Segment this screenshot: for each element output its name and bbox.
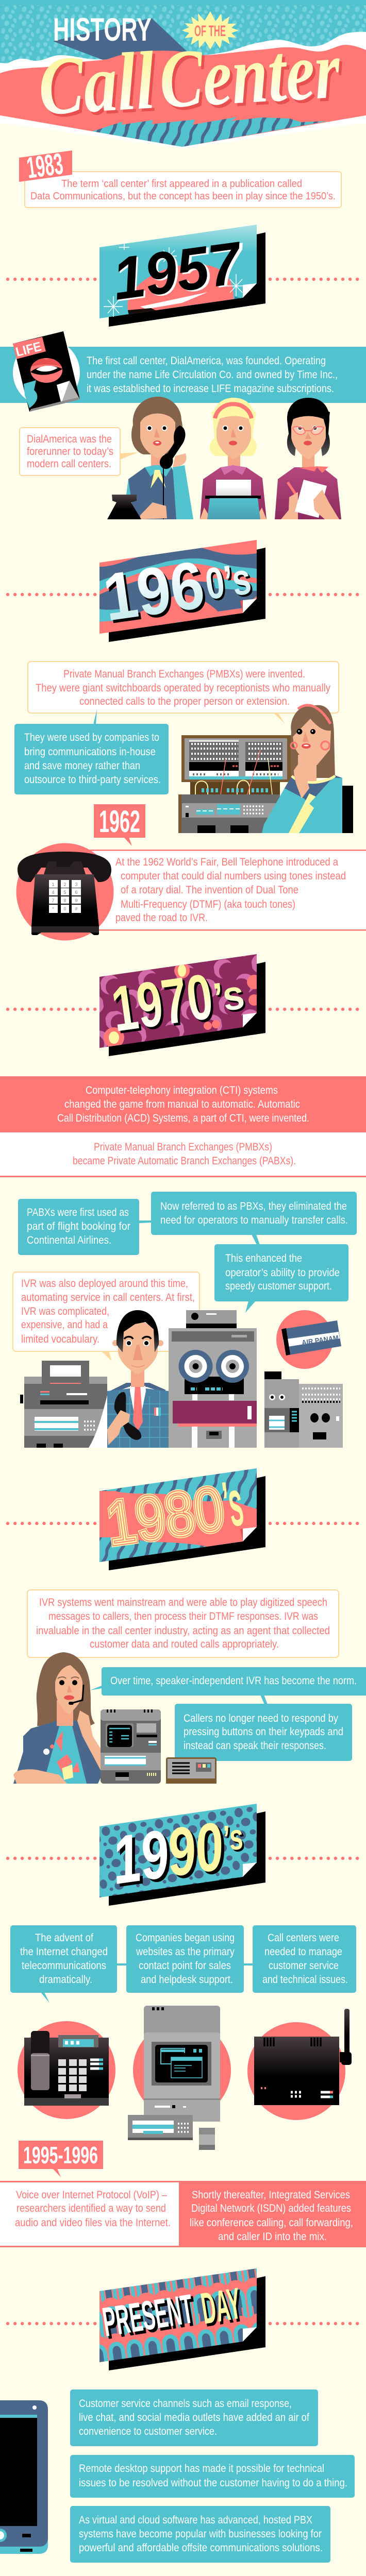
section heading: 1957 — [8, 222, 358, 327]
section heading: 1970's: ’s — [210, 971, 247, 1021]
teal callout: customer service channels: Customer service channels such as email response, — [79, 2398, 292, 2410]
keypad: 1 — [52, 882, 55, 887]
year tag: 1983 — [19, 147, 72, 185]
teal callout: call centers needed: and technical issues. — [262, 1974, 348, 1986]
icon: AIR PANAM ticket: AIR PANAM — [301, 1333, 339, 1347]
text box: PMBXs invented: They were giant switchboards operated by receptionists who manually — [36, 682, 330, 694]
section heading: 1990's: ’s — [220, 1816, 246, 1859]
text box: 1983: Data Communications, but the concept has been in play since the 1950’s. — [30, 191, 336, 202]
teal callout: websites: websites as the primary — [136, 1946, 235, 1958]
illustration: tape deck — [169, 1310, 257, 1448]
section heading: 1960's: 0’s — [204, 555, 256, 611]
teal callout: speedy support: operator’s ability to provide — [225, 1267, 340, 1279]
icon: LIFE magazine: LIFE — [14, 340, 43, 360]
text box: IVR deployed: IVR was complicated, — [21, 1306, 109, 1317]
keypad — [49, 880, 81, 913]
section heading: Present Day: PRESENT — [102, 2288, 199, 2347]
teal callout: customer service channels — [70, 2389, 318, 2446]
teal callout: the Internet — [10, 1925, 117, 2003]
teal callout: speaker-independent — [90, 1667, 366, 1704]
year tag: 1962 — [94, 804, 145, 846]
teal callout: call centers needed: Call centers were — [268, 1932, 339, 1944]
icon: desktop computer — [128, 2006, 231, 2150]
teal callout: websites — [117, 1925, 253, 1993]
text box: IVR mainstream: customer data and routed calls appropriately. — [90, 1638, 279, 1650]
section heading: 1960's — [8, 537, 358, 642]
teal callout: customer service channels: live chat, and social media outlets have added an air of — [79, 2412, 309, 2424]
section heading: 1970's: 1970 — [108, 961, 217, 1045]
illustration: woman with notepad — [275, 398, 341, 519]
teal callout: customer service channels: convenience to customer service. — [79, 2426, 217, 2437]
white band: 1962 World's Fair: paved the road to IVR. — [115, 912, 208, 924]
teal callout: speak responses: instead can speak their responses. — [184, 1740, 326, 1752]
icon: smartphone — [0, 2400, 48, 2554]
section heading: 1990's: 90 — [165, 1810, 231, 1893]
section heading: 1980's: ’s — [219, 1468, 246, 1539]
teal callout: hosted PBX: systems have become popular with businesses looking for — [79, 2528, 322, 2540]
text box: IVR mainstream — [27, 1590, 339, 1657]
section heading: 1960's: 196 — [99, 547, 209, 635]
text box: IVR mainstream: messages to callers, then process their DTMF responses. IVR was — [48, 1611, 318, 1622]
teal callout: PBXs — [151, 1192, 357, 1245]
illustration: woman on the phone — [107, 397, 193, 519]
section heading: 1957: 1957 — [109, 229, 247, 313]
coral band: CTI systems: Computer-telephony integration (CTI) systems — [86, 1084, 278, 1096]
teal callout: speedy support: speedy customer support. — [225, 1280, 332, 1292]
teal band: 1957 description — [0, 347, 366, 403]
teal callout: remote desktop support: Remote desktop support has made it possible for technical — [79, 2463, 324, 2475]
illustration: receptionist — [262, 705, 353, 833]
section heading: Present Day: DAY — [198, 2279, 244, 2333]
panel: VoIP — [0, 2182, 179, 2246]
text box: 1983 — [25, 172, 341, 208]
teal callout: speak responses — [175, 1704, 352, 1761]
starburst: of the: OF THE — [194, 23, 226, 40]
illustration: man with handset — [89, 1310, 180, 1448]
keypad: 9 — [75, 898, 78, 903]
illustration: printer terminal — [20, 1361, 107, 1448]
illustration: switchboard — [178, 735, 294, 833]
title: Call Center — [36, 23, 346, 135]
text box: IVR deployed: expensive, and had a — [21, 1319, 108, 1331]
teal callout: websites: contact point for sales — [139, 1960, 231, 1972]
panel: VoIP: audio and video files via the Internet. — [15, 2217, 171, 2229]
callout: DialAmerica: DialAmerica was the — [27, 433, 112, 445]
text box: IVR mainstream: IVR systems went mainstream and were able to play digitized speech — [39, 1597, 327, 1608]
section heading: 1990's: ’s — [222, 1818, 247, 1861]
section heading: 1980's: 1980 — [102, 1473, 228, 1558]
section heading: 1970's: 1970 — [110, 963, 220, 1047]
section heading: Present Day: DAY — [200, 2281, 246, 2336]
teal callout: hosted PBX: As virtual and cloud software has advanced, hosted PBX — [79, 2514, 312, 2526]
panel: VoIP: researchers identified a way to send — [16, 2202, 166, 2214]
icon: AIR PANAM ticket — [276, 1310, 341, 1369]
keypad: 3 — [75, 882, 78, 887]
section heading: 1970's — [8, 951, 358, 1056]
teal callout: speak responses: Callers no longer need to respond by — [184, 1713, 338, 1724]
sparkles — [104, 243, 247, 317]
year tag: 1995-1996 — [19, 2141, 103, 2177]
section heading: 1970's: ’s — [212, 973, 249, 1023]
teal callout: the Internet: the Internet changed — [20, 1946, 108, 1958]
section heading: 1990's: 19 — [110, 1818, 176, 1901]
teal callout: the Internet: telecommunications — [22, 1960, 106, 1972]
teal callout: call centers needed: needed to manage — [264, 1946, 342, 1958]
teal callout: flight booking: part of flight booking for — [27, 1221, 130, 1232]
teal callout: websites: and helpdesk support. — [141, 1974, 233, 1986]
year tag: 1962: 1962 — [99, 804, 140, 839]
white band: 1962 World's Fair: At the 1962 World’s Fair, Bell Telephone introduced a — [115, 856, 338, 868]
illustration: control console — [264, 1371, 343, 1448]
teal callout: remote desktop support — [70, 2455, 355, 2498]
section heading: 1960's: 196 — [101, 549, 211, 638]
starburst: of the — [182, 11, 239, 49]
keypad: 7 — [52, 898, 55, 903]
coral band: CTI systems: changed the game from manual to automatic. Automatic — [64, 1098, 300, 1110]
illustration: agent with headset — [13, 1652, 114, 1784]
white band: PABXs: became Private Automatic Branch Exchanges (PABXs). — [73, 1155, 296, 1167]
illustration: woman at typewriter — [200, 398, 267, 519]
teal callout: used by companies: They were used by companies to — [24, 732, 159, 743]
panel: ISDN: and caller ID into the mix. — [218, 2231, 327, 2243]
keypad: 4 — [52, 890, 55, 895]
band: VoIP and ISDN — [0, 2181, 366, 2247]
teal callout: flight booking — [18, 1199, 151, 1255]
icon: desk telephone — [16, 843, 113, 941]
teal callout: used by companies — [14, 709, 169, 794]
text box: 1983: The term ‘call center’ first appeared in a publication called — [61, 178, 302, 190]
header banner — [0, 0, 366, 148]
teal callout: hosted PBX — [70, 2506, 330, 2563]
teal callout: speak responses: pressing buttons on their keypads and — [184, 1726, 343, 1738]
teal callout: used by companies: and save money rather than — [24, 760, 140, 772]
keypad: # — [75, 906, 78, 911]
icon: office telephone — [18, 2021, 115, 2119]
keypad: * — [52, 906, 54, 911]
white band: 1962 World's Fair: Multi-Frequency (DTMF) (aka touch tones) — [121, 899, 295, 910]
section heading: 1990's — [8, 1801, 358, 1906]
teal callout: websites: Companies began using — [136, 1932, 235, 1944]
title: Call Center: Call — [36, 34, 157, 132]
teal callout: speedy support: This enhanced the — [225, 1252, 302, 1264]
teal callout: speedy support — [214, 1244, 348, 1313]
teal callout: the Internet: dramatically. — [39, 1974, 92, 1986]
keypad: 8 — [63, 898, 66, 903]
teal callout: call centers needed — [253, 1925, 356, 1993]
blue title shadow — [53, 18, 188, 60]
text box: PMBXs invented: connected calls to the proper person or extension. — [79, 696, 290, 707]
teal callout: used by companies: bring communications in-house — [24, 746, 156, 758]
title: Call Center: Call — [39, 37, 160, 135]
text box: IVR deployed: automating service in call centers. At first, — [21, 1292, 195, 1303]
text box: IVR deployed — [13, 1272, 199, 1361]
title: HISTORY: HISTORY — [53, 12, 152, 48]
coral band: CTI systems: Call Distribution (ACD) Systems, a part of CTI, were invented. — [57, 1112, 309, 1124]
section heading: 1980's: 1980 — [102, 1473, 228, 1558]
white band: PABXs: Private Manual Branch Exchanges (PMBXs) — [94, 1141, 272, 1153]
keypad: 6 — [75, 890, 78, 895]
teal callout: hosted PBX: powerful and affordable offsite communications solutions. — [79, 2542, 323, 2554]
panel: VoIP: Voice over Internet Protocol (VoIP) – — [16, 2189, 167, 2201]
section heading: 1990's: 90 — [162, 1808, 228, 1891]
callout: DialAmerica — [20, 428, 138, 476]
section heading: 1980's: 1980 — [102, 1473, 228, 1558]
teal callout: flight booking: PABXs were first used as — [27, 1207, 129, 1218]
text box: PMBXs invented — [28, 662, 339, 724]
illustration: computer console — [101, 1709, 161, 1784]
teal band: 1957 description: The first call center, DialAmerica, was founded. Operating — [87, 355, 326, 367]
zebra strip — [92, 117, 328, 147]
white band: 1962 World's Fair — [52, 850, 366, 930]
keypad: 0 — [63, 906, 66, 911]
text box: IVR deployed: IVR was also deployed around this time, — [21, 1278, 188, 1290]
year tag: 1983: 1983 — [25, 147, 65, 185]
section heading: 1980's — [8, 1465, 358, 1570]
text box: IVR mainstream: invaluable in the call center industry, acting as an agent that collected — [36, 1625, 330, 1637]
teal callout: the Internet: The advent of — [35, 1932, 93, 1944]
section heading: 1957: 1957 — [110, 230, 251, 314]
illustration: small terminal — [166, 1757, 217, 1784]
white band: PABXs — [0, 1132, 366, 1177]
icon: network router — [247, 2009, 352, 2120]
year tag: 1995-1996: 1995-1996 — [23, 2142, 98, 2168]
teal callout: flight booking: Continental Airlines. — [27, 1234, 111, 1246]
icon: LIFE magazine — [13, 331, 80, 412]
white band: 1962 World's Fair: of a rotary dial. The invention of Dual Tone — [121, 884, 298, 896]
callout: DialAmerica: forerunner to today’s — [27, 446, 113, 457]
section heading: 1990's: 19 — [107, 1816, 173, 1899]
section heading: 1960's: 0’s — [202, 554, 254, 609]
keypad: 2 — [63, 882, 66, 887]
section heading: Present Day — [8, 2265, 358, 2370]
coral band: CTI systems — [0, 1076, 366, 1132]
section heading: Present Day: PRESENT — [99, 2285, 196, 2345]
teal callout: used by companies: outsource to third-party services. — [24, 774, 161, 786]
keypad: 5 — [63, 890, 66, 895]
text box: IVR deployed: limited vocabulary. — [21, 1333, 99, 1345]
panel: ISDN — [190, 2189, 353, 2243]
teal band: 1957 description: it was established to increase LIFE magazine subscriptions. — [87, 383, 334, 395]
teal callout: call centers needed: customer service — [269, 1960, 339, 1972]
text box: PMBXs invented: Private Manual Branch Exchanges (PMBXs) were invented. — [63, 668, 305, 680]
callout: DialAmerica: modern call centers. — [27, 458, 111, 470]
